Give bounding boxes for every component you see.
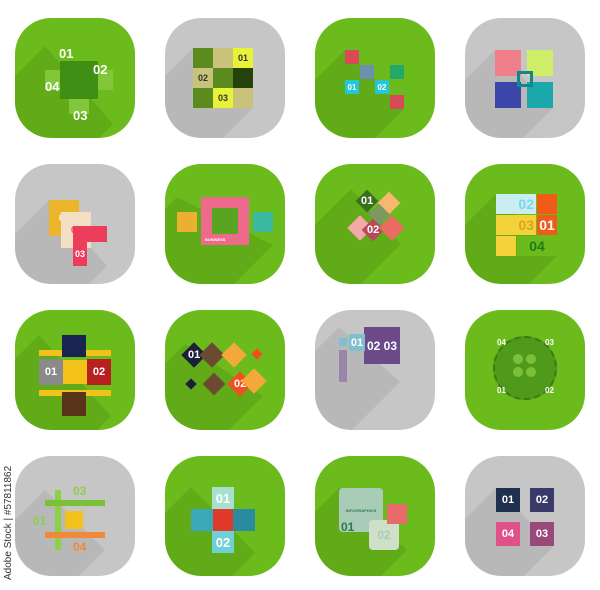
tile 11: grey purple 02/03: 02 03	[367, 338, 397, 352]
tile 11: grey purple 02/03: 01	[351, 336, 363, 348]
tile 1: green cross 01-04: 01	[59, 46, 73, 61]
tile 8: green colored grid 01-04	[465, 164, 585, 284]
tile 6: green pink center panel: BUSINESS	[205, 237, 225, 242]
tile 14: green teal cross	[165, 456, 285, 576]
tile 2: grey 3x3 olive grid	[165, 18, 285, 138]
tile 12: green circle ring: 04	[497, 338, 506, 347]
tile 5: grey L shapes 01-03	[15, 164, 135, 284]
tile 3: green scattered squares: 02	[378, 82, 386, 92]
tile 13: grey green/orange grid: 01	[33, 514, 46, 528]
tile 16: grey 2x2 numbered: 04	[502, 528, 514, 540]
tile 2: grey 3x3 olive grid: 01	[238, 53, 248, 63]
tile 9: green stacked cross	[15, 310, 135, 430]
tile 13: grey green/orange grid: 04	[73, 540, 86, 554]
tile 7: green diamonds: 01	[361, 195, 373, 207]
tile 1: green cross 01-04: 04	[45, 79, 59, 94]
tile 12: green circle ring	[465, 310, 585, 430]
tile 7: green diamonds: 02	[367, 224, 379, 236]
tile 4: grey 2x2 framed squares	[465, 18, 585, 138]
tile 5: grey L shapes 01-03: 03	[75, 249, 85, 259]
tile 10: green diamonds dark/orange: 01	[188, 349, 200, 361]
tile 14: green teal cross: 01	[216, 490, 230, 506]
tile 12: green circle ring: 02	[545, 386, 554, 395]
tile 5: grey L shapes 01-03: 01	[59, 213, 69, 223]
tile 15: green infographics squares	[315, 456, 435, 576]
tile 12: green circle ring: 03	[545, 338, 554, 347]
tile 13: grey green/orange grid: 03	[73, 484, 86, 498]
tile 10: green diamonds dark/orange	[165, 310, 285, 430]
tile 1: green cross 01-04: 03	[73, 108, 87, 123]
tile 1: green cross 01-04: 02	[93, 62, 107, 77]
tile 8: green colored grid 01-04: 02	[518, 196, 534, 212]
tile 9: green stacked cross: 02	[93, 366, 105, 378]
tile 7: green diamonds	[315, 164, 435, 284]
tile 16: grey 2x2 numbered: 01	[502, 494, 514, 506]
tile 5: grey L shapes 01-03: 02	[71, 225, 81, 235]
tile 12: green circle ring: 01	[497, 386, 506, 395]
tile 11: grey purple 02/03	[315, 310, 435, 430]
tile 2: grey 3x3 olive grid: 02	[198, 73, 208, 83]
tile 1: green cross 01-04	[15, 18, 135, 138]
tile 9: green stacked cross: 01	[45, 366, 57, 378]
tile 16: grey 2x2 numbered: 03	[536, 528, 548, 540]
tile 15: green infographics squares: 02	[377, 528, 391, 542]
tile 6: green pink center panel	[165, 164, 285, 284]
tile 14: green teal cross: 02	[216, 534, 230, 550]
watermark id text: Adobe Stock | #57811862	[3, 466, 14, 580]
tile 16: grey 2x2 numbered: 02	[536, 494, 548, 506]
tile 8: green colored grid 01-04: 03	[518, 217, 534, 233]
tile 16: grey 2x2 numbered	[465, 456, 585, 576]
tile 2: grey 3x3 olive grid: 03	[218, 93, 228, 103]
tile 15: green infographics squares: INFOGRAPHICS	[346, 508, 376, 512]
tile 15: green infographics squares: 01	[341, 520, 354, 534]
tile 8: green colored grid 01-04: 04	[529, 238, 545, 254]
tile 13: grey green/orange grid	[15, 456, 135, 576]
tile 8: green colored grid 01-04: 01	[539, 217, 555, 233]
tile 3: green scattered squares: 01	[348, 82, 356, 92]
tile 10: green diamonds dark/orange: 02	[234, 378, 246, 390]
tile 3: green scattered squares	[315, 18, 435, 138]
